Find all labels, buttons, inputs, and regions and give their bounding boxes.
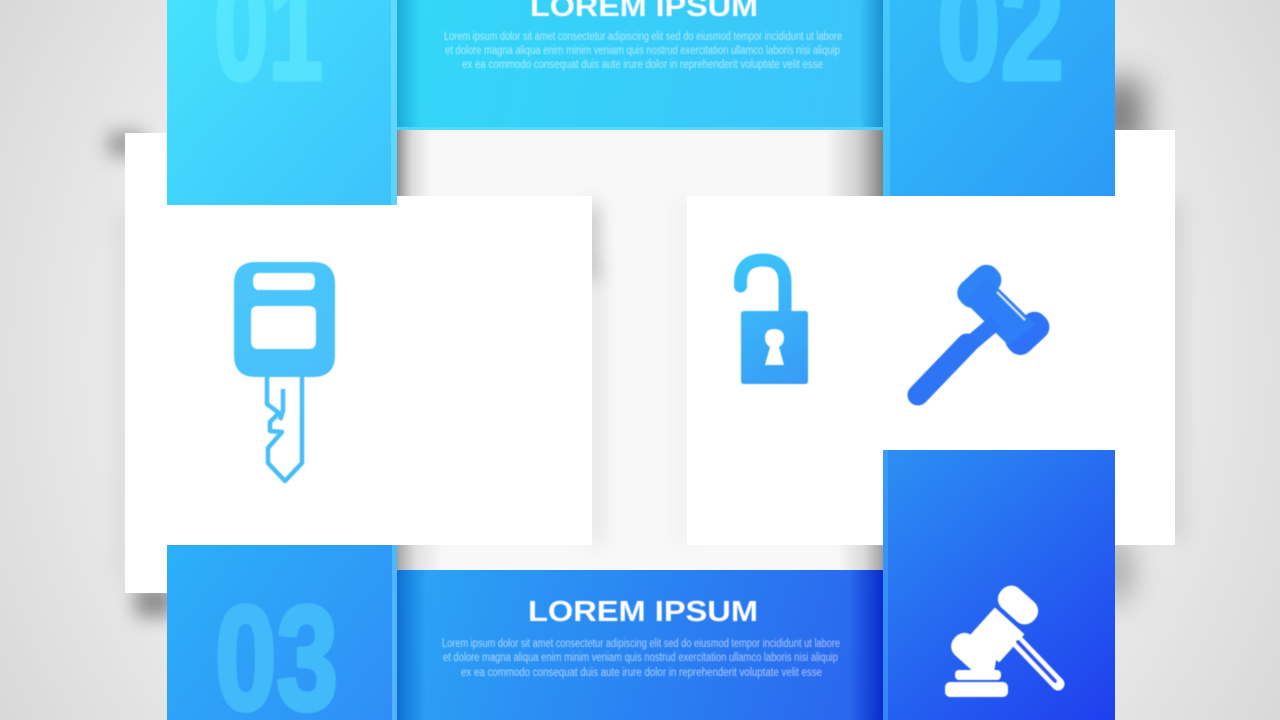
text block: bottom: et dolore magna aliqua enim minim veniam quis nostrud exercitation ullamco laboris nisi aliquip — [443, 652, 838, 664]
panel: column 04 — [883, 450, 1115, 720]
text block: bottom: Lorem ipsum dolor sit amet consectetur adipiscing elit sed do eiusmod tempor incididunt ut labore — [442, 638, 840, 650]
text block: top: Lorem ipsum dolor sit amet consectetur adipiscing elit sed do eiusmod tempor incididunt ut labore — [444, 31, 842, 43]
heading: bottom: LOREM IPSUM — [528, 596, 758, 628]
text block: top: ex ea commodo consequat duis aute irure dolor in reprehenderit voluptate velit esse — [462, 59, 823, 71]
panel: top banner — [397, 0, 883, 130]
icon: open padlock — [740, 260, 808, 384]
text block: bottom: ex ea commodo consequat duis aute irure dolor in reprehenderit voluptate velit esse — [461, 667, 822, 679]
panel: column 02 — [883, 0, 1115, 196]
text block: bottom — [442, 638, 840, 679]
icon: gavel and block (white) — [945, 581, 1058, 697]
panel: column 01 — [167, 0, 397, 205]
panel: left white card top extension — [397, 196, 592, 208]
text block: top — [444, 31, 842, 71]
panel: column 03 — [167, 545, 397, 720]
panel: bottom banner — [397, 570, 883, 720]
panel: left white card shadow — [586, 200, 688, 545]
icon: gavel (blue) — [918, 259, 1055, 395]
panel: right white card — [687, 196, 1175, 545]
drop shadows on background — [108, 80, 1182, 617]
panel: left white card — [125, 205, 592, 545]
panel: white backing sheet — [125, 130, 1175, 593]
icon: car key — [234, 262, 335, 481]
text block: top: et dolore magna aliqua enim minim veniam quis nostrud exercitation ullamco laboris nisi aliquip — [445, 45, 840, 57]
